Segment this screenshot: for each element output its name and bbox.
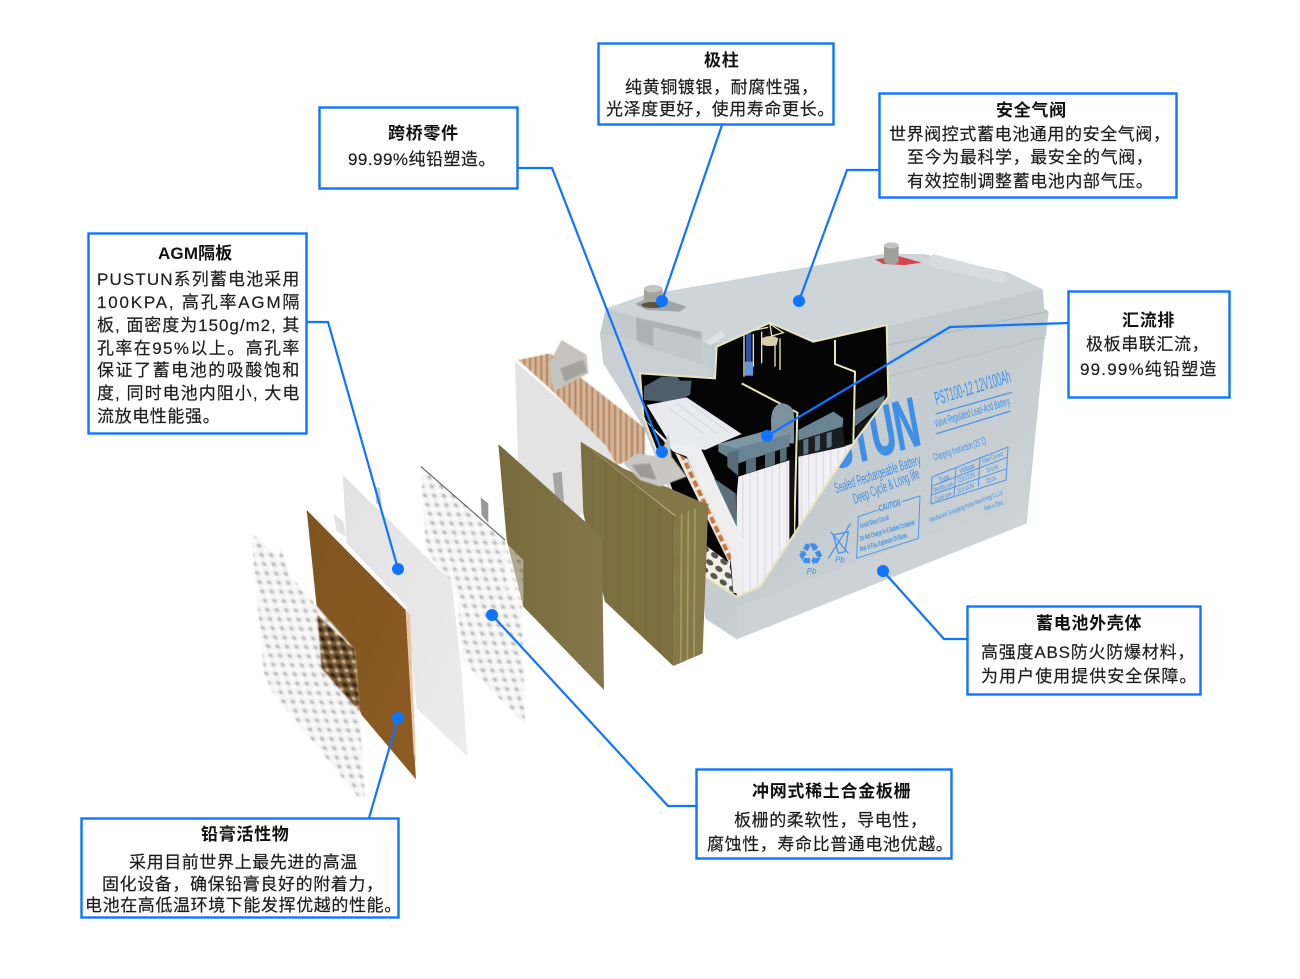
- description: 板栅的柔软性，导电性，: [734, 811, 928, 830]
- positive terminal with red seal: [875, 242, 922, 265]
- description: [981, 643, 1197, 686]
- handle recess: [636, 317, 725, 364]
- AGM tab: [375, 487, 382, 507]
- description: 保证了蓄电池的吸酸饱和: [97, 361, 300, 380]
- description: 孔率在95%以上。高孔率: [97, 339, 300, 358]
- battery with cut-away interior: Charging Instruction (25℃): [932, 436, 988, 464]
- battery with cut-away interior: Do Not Charge In A Sealed Container: [859, 517, 917, 543]
- description: [707, 811, 953, 854]
- leader line: safety valve: [793, 170, 879, 307]
- description: 度, 同时电池内阻小, 大电: [97, 384, 300, 403]
- heading: 蓄电池外壳体: [1036, 613, 1142, 633]
- back comb: [798, 412, 843, 441]
- heading: 极柱: [704, 51, 739, 70]
- description: 电池在高低温环境下能发挥优越的性能。: [85, 896, 402, 915]
- leader line: terminal: [656, 125, 722, 307]
- caution box: Avoid Short Circuit: [858, 513, 890, 530]
- description: 板, 面密度为150g/m2, 其: [97, 316, 300, 335]
- description: 高强度ABS防火防爆材料，: [981, 643, 1195, 662]
- description: [97, 270, 300, 426]
- description: [889, 125, 1171, 191]
- battery with cut-away interior: Manufacturer: Guangdong Pustun New Energy Co.,Ltd: [928, 490, 1004, 524]
- charging table: 25.0A: [985, 475, 998, 485]
- heading: 冲网式稀土合金板栅: [752, 781, 911, 801]
- caution box: Risk of Fire, Explosion Or Burns: [859, 531, 908, 554]
- leader line: grid: [486, 609, 696, 806]
- stack side: [673, 503, 708, 666]
- leader line: battery case: [877, 565, 967, 639]
- callout: 安全气阀: [880, 94, 1176, 198]
- valve detail: [743, 324, 785, 377]
- description: 有效控制调整蓄电池内部气压。: [907, 172, 1153, 191]
- lid front band: [888, 289, 1049, 375]
- battery with cut-away interior: PST100-12 12V100Ah: [932, 366, 1013, 409]
- brown paste plate: [307, 510, 416, 779]
- stack front plate: [581, 442, 675, 666]
- description: 采用目前世界上最先进的高温: [129, 853, 358, 872]
- description: PUSTUN系列蓄电池采用: [97, 270, 300, 289]
- description: [85, 853, 402, 915]
- caution box: CAUTION: [878, 498, 902, 514]
- battery with cut-away interior: Sealed Rechargeable Battery: [832, 452, 924, 497]
- brand mark STUN: PUSTUN: [772, 385, 929, 497]
- AGM separator: [343, 475, 467, 757]
- infographic: battery structure diagram: [80, 42, 1231, 919]
- front terminal strap: [623, 433, 687, 487]
- copper plate edges: [518, 353, 645, 465]
- mesh tab: [481, 497, 488, 523]
- right plates: [798, 443, 853, 527]
- description: 极板串联汇流，: [1086, 335, 1209, 354]
- charging table: No-Limit: [986, 464, 1000, 475]
- heading: 跨桥零件: [388, 124, 459, 143]
- grey-blue plate edge: [714, 478, 737, 527]
- crossed bin icon: [828, 523, 851, 565]
- stack top: [581, 442, 708, 517]
- charging table: 13.6-13.8V: [956, 471, 977, 485]
- heading: 汇流排: [1122, 311, 1175, 330]
- description: [1080, 335, 1217, 379]
- description: [606, 78, 835, 119]
- heading: AGM隔板: [158, 244, 233, 263]
- caution box: [857, 496, 920, 558]
- battery with cut-away interior: Deep Cycle & Long life: [851, 466, 922, 508]
- negative terminal post: [635, 285, 687, 312]
- callout: 铅膏活性物: [82, 818, 402, 918]
- post on partition: [771, 403, 794, 443]
- charging table: 14.4-14.8V: [956, 482, 976, 495]
- gold plate: [498, 444, 604, 690]
- callout: 蓄电池外壳体: [968, 606, 1200, 694]
- plate stack rear white separator: [515, 362, 613, 517]
- description: 99.99%纯铅塑造。: [348, 150, 496, 169]
- mesh grid plate: [421, 467, 525, 725]
- description: 99.99%纯铅塑造: [1080, 360, 1217, 379]
- heading: 安全气阀: [996, 100, 1067, 120]
- lid vent cover: [927, 254, 1009, 283]
- divider bar: [789, 460, 794, 547]
- callout: 冲网式稀土合金板栅: [696, 770, 953, 858]
- charging table: Type: [937, 472, 951, 485]
- lower case edge: [737, 500, 1027, 639]
- description: 100KPA, 高孔率AGM隔: [97, 293, 300, 312]
- orange grid edge: [675, 453, 732, 565]
- front busbar: [718, 429, 790, 463]
- recycle icon: ♻: [797, 538, 824, 573]
- partition walls: [742, 340, 855, 540]
- lower cell grid: [705, 545, 733, 593]
- leader line: lead paste: [369, 712, 404, 818]
- callout: 跨桥零件: [320, 108, 518, 188]
- description: 固化设备，确保铅膏良好的附着力，: [102, 874, 384, 894]
- description: 至今为最科学，最安全的气阀，: [907, 148, 1153, 167]
- charging table: Initial Current: [981, 451, 1005, 465]
- cut-away interior: [640, 323, 888, 597]
- description: 流放电性能强。: [97, 407, 220, 426]
- description: 腐蚀性，寿命比普通电池优越。: [707, 835, 953, 854]
- callout: 汇流排: [1068, 292, 1230, 398]
- crossed bin icon: Pb: [835, 556, 845, 565]
- battery with cut-away interior: Valve Regulated Lead-Acid Battery: [933, 396, 1012, 430]
- charging table: [931, 447, 1008, 504]
- leader line: AGM separator: [307, 322, 404, 575]
- callout: 极柱: [598, 44, 835, 124]
- description: 为用户使用提供安全保障。: [981, 666, 1197, 686]
- recycle icon: Pb: [807, 567, 817, 576]
- interior outline: [640, 323, 888, 597]
- terminal post inside: [644, 377, 692, 403]
- leader line: bridge part: [518, 168, 668, 458]
- white plates left cell: [737, 460, 790, 597]
- description: 世界阀控式蓄电池通用的安全气阀，: [889, 125, 1171, 144]
- left wall: [600, 333, 715, 427]
- front mesh grid: [251, 533, 365, 798]
- charging table: Voltage: [958, 461, 976, 475]
- description: 光泽度更好，使用寿命更长。: [606, 99, 835, 119]
- manufacturer label: [928, 490, 1004, 524]
- heading: 铅膏活性物: [201, 824, 290, 844]
- paste tab: [333, 513, 346, 537]
- battery with cut-away interior: [600, 242, 1049, 639]
- description: 纯黄铜镀银，耐腐性强，: [625, 78, 819, 97]
- battery lid top face: [606, 254, 1043, 343]
- back busbar: [855, 395, 885, 427]
- leader line: busbar: [761, 323, 1068, 442]
- charging table: Cycle use: [934, 491, 952, 504]
- separator panel: [643, 418, 743, 595]
- charging table: Standby use: [932, 481, 954, 495]
- rear terminal strap: [548, 340, 588, 392]
- exploded battery plates: [251, 340, 708, 798]
- tab: [553, 472, 564, 502]
- battery with cut-away interior: Made in China: [983, 500, 1004, 513]
- battery case body: [600, 254, 1049, 639]
- callout: AGM隔板: [88, 234, 306, 434]
